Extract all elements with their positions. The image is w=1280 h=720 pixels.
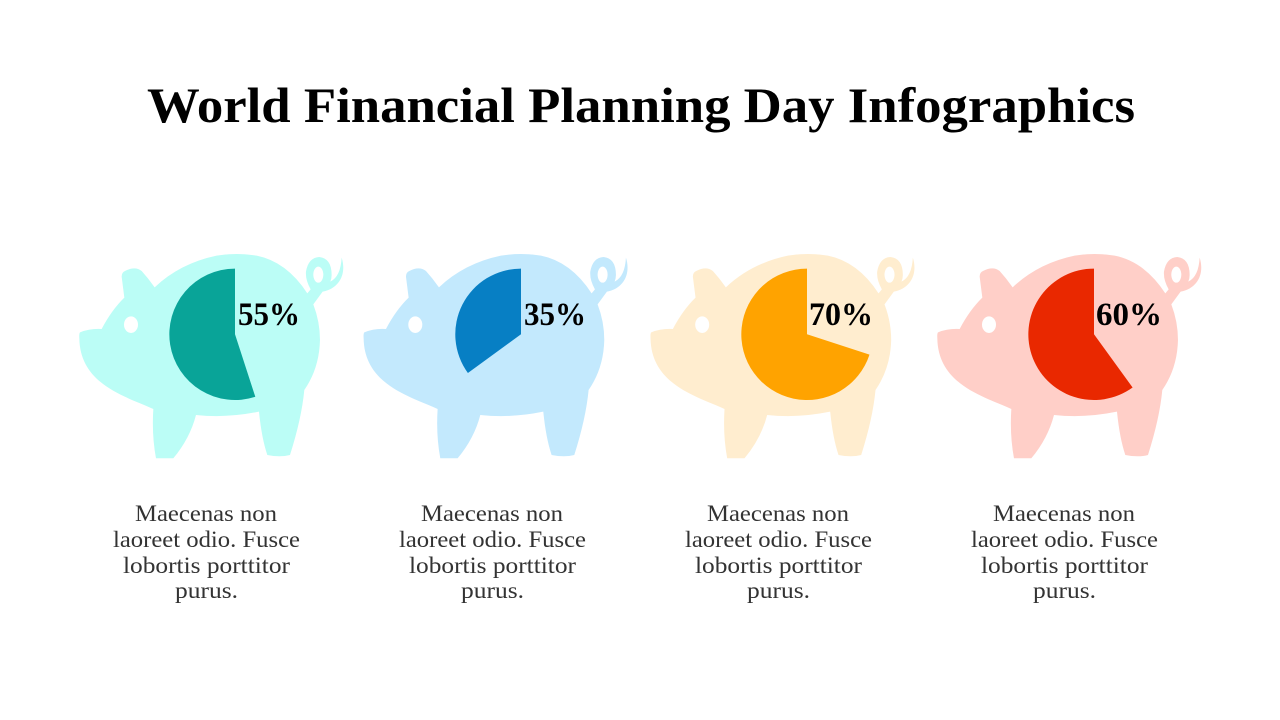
panel: 60% piggy (937, 254, 1201, 603)
description: lobortis porttitor (409, 553, 576, 578)
icon: red pig silhouette (937, 254, 1201, 458)
panel: 35% piggy (364, 254, 628, 603)
description: Maecenas non (707, 501, 850, 526)
icon: orange pig silhouette (650, 254, 914, 458)
value: 60%: 60% (1096, 297, 1162, 333)
pie chart: 60% (1028, 269, 1133, 400)
icon: teal pig silhouette (79, 254, 343, 458)
description: laoreet odio. Fusce (685, 527, 872, 552)
description: purus. (747, 578, 810, 603)
description: Maecenas non (993, 501, 1136, 526)
panel: 55% piggy (79, 254, 343, 603)
description (113, 501, 300, 603)
description: lobortis porttitor (695, 553, 862, 578)
pie chart: 35% (455, 269, 521, 373)
description: Maecenas non (135, 501, 278, 526)
description: laoreet odio. Fusce (399, 527, 586, 552)
description: Maecenas non (421, 501, 564, 526)
value: 70%: 70% (809, 297, 873, 333)
description: purus. (1033, 578, 1096, 603)
title: World Financial Planning Day Infographics (147, 77, 1135, 133)
description: lobortis porttitor (123, 553, 290, 578)
pie chart: 70% (741, 269, 870, 400)
description (971, 501, 1158, 603)
description (399, 501, 586, 603)
value: 35%: 35% (524, 297, 586, 333)
description: laoreet odio. Fusce (113, 527, 300, 552)
description: purus. (175, 578, 238, 603)
description: purus. (461, 578, 524, 603)
description: lobortis porttitor (981, 553, 1148, 578)
panel: 70% piggy (650, 254, 914, 603)
description (685, 501, 872, 603)
description: laoreet odio. Fusce (971, 527, 1158, 552)
icon: blue pig silhouette (364, 254, 628, 458)
value: 55%: 55% (238, 297, 300, 333)
pie chart: 55% (169, 269, 255, 400)
